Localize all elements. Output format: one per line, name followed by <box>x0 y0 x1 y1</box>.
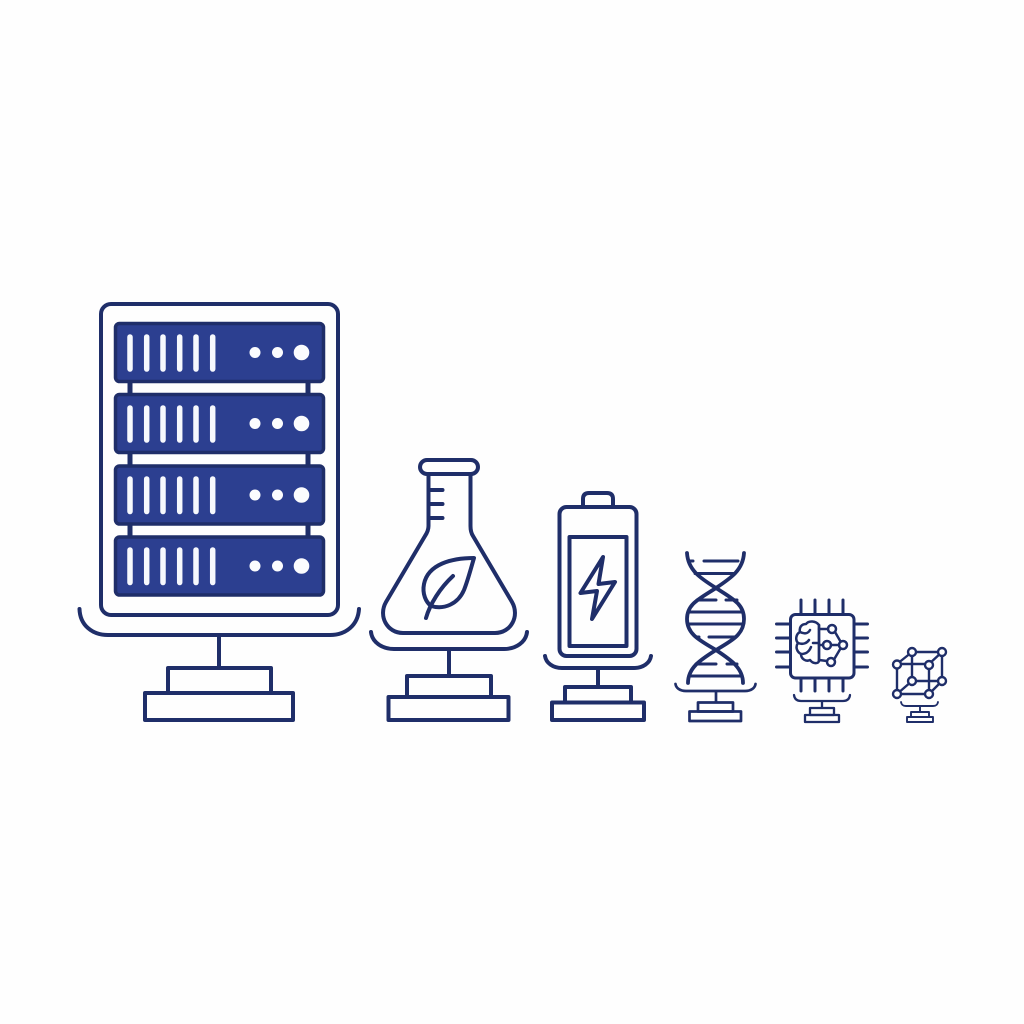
battery stand <box>545 656 651 720</box>
DNA stand <box>676 684 756 721</box>
helix rungs <box>689 561 742 676</box>
cube edges <box>897 652 942 694</box>
battery cap <box>583 493 613 506</box>
helix strands <box>687 553 744 683</box>
rack connectors <box>130 382 308 536</box>
cube nodes <box>893 648 946 698</box>
leaf <box>423 558 474 618</box>
brain <box>796 621 847 666</box>
flask stand <box>371 632 527 720</box>
server stand <box>80 609 359 720</box>
battery body <box>560 507 636 656</box>
chip pins <box>776 600 868 691</box>
icon: molecular cube <box>893 648 946 722</box>
chip stand <box>794 695 850 722</box>
flask rim <box>420 460 478 474</box>
icon: battery with bolt <box>545 493 651 720</box>
icon: AI chip with brain <box>776 600 868 722</box>
flask tick marks <box>429 490 442 518</box>
cube stand <box>901 702 938 722</box>
icon: flask with leaf <box>371 460 527 720</box>
chip body <box>790 614 854 678</box>
server cabinet outline <box>101 304 338 615</box>
icon: DNA helix <box>676 553 756 721</box>
lightning bolt <box>580 557 615 619</box>
server unit 2 <box>116 394 324 452</box>
icon: server rack <box>80 304 359 720</box>
battery inner panel <box>570 537 626 646</box>
server unit 1 <box>116 324 324 382</box>
server unit 3 <box>116 466 324 524</box>
server unit 4 <box>116 537 324 595</box>
flask body <box>383 474 515 633</box>
